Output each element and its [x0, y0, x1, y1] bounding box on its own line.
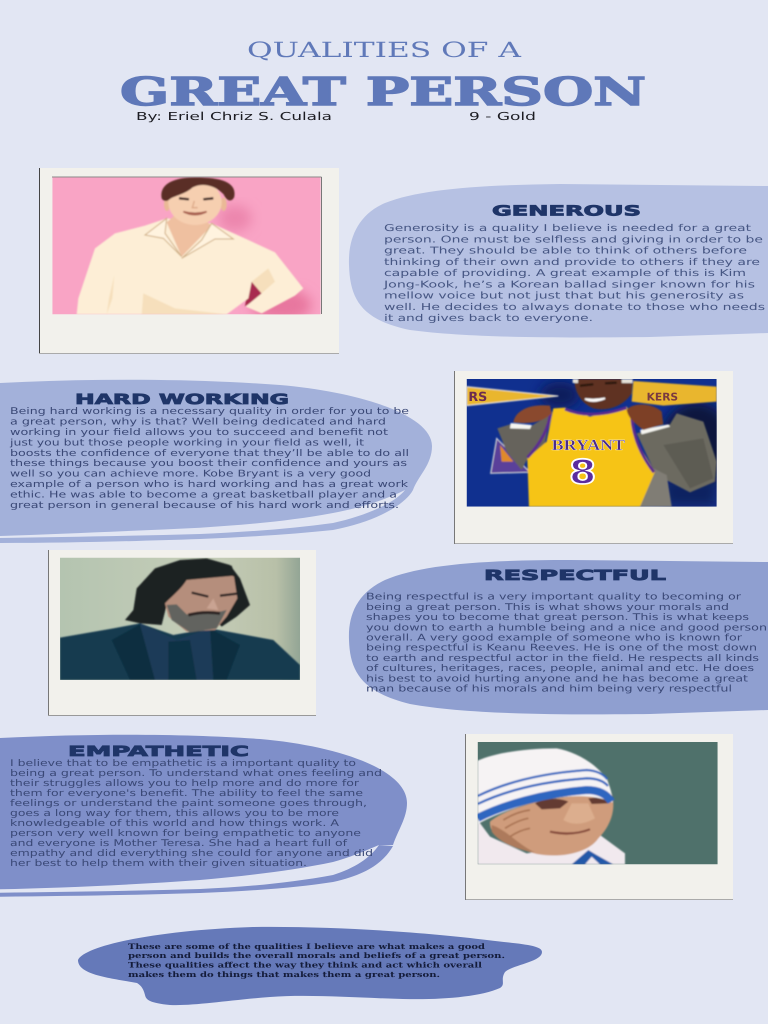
- body text: respectful: being respectful is Keanu Reeves. He is one of the most down: [366, 643, 757, 654]
- body text: hard working: these things because you boost their confidence and yours as: [10, 458, 407, 469]
- closing text: These are some of the qualities I believe are what makes a good: [128, 942, 486, 951]
- title: great person: GREAT PERSON: [120, 70, 646, 115]
- body text: generous: Generosity is a quality I believe is needed for a great: [384, 223, 751, 234]
- heading: hard working: HARD WORKING: [75, 392, 289, 408]
- body text: empathetic: them for everyone's benefit. The ability to feel the same: [10, 788, 363, 799]
- panel: empathetic: [0, 735, 407, 897]
- body text: respectful: man because of his morals and him being very respectful: [366, 684, 732, 694]
- body text: generous: [382, 223, 765, 324]
- photo card: Keanu Reeves: [48, 550, 316, 716]
- body text: respectful: to earth and respectful actor in the field. He respects all kinds: [366, 653, 759, 664]
- body text: respectful: Being respectful is a very important quality to becoming or: [366, 592, 741, 603]
- swoosh under panel: [0, 490, 413, 543]
- panel background shape: [0, 735, 407, 889]
- body text: generous: well. He decides to always donate to those who needs: [384, 302, 765, 313]
- photo card: Kobe Bryant: KERS: [647, 390, 678, 403]
- body text: respectful: [366, 592, 767, 694]
- body text: hard working: boosts the confidence of everyone that they’ll be able to do all: [10, 448, 409, 459]
- closing text: makes them do things that makes them a great person.: [128, 970, 440, 979]
- panel: closing statement: [78, 927, 542, 1005]
- body text: empathetic: feelings or understand the paint someone goes through,: [10, 798, 367, 809]
- closing text: These qualities affect the way they think and act which overall: [128, 961, 482, 970]
- closing text: [128, 942, 505, 979]
- panel: respectful: [349, 560, 768, 714]
- body text: empathetic: being a great person. To understand what ones feeling and: [10, 768, 382, 779]
- author byline: By: Eriel Chriz S. Culala: [136, 110, 332, 123]
- swoosh under panel: [0, 845, 393, 897]
- body text: respectful: his best to avoid hurting anyone and he has become a great: [366, 673, 749, 684]
- panel background shape: [349, 184, 768, 337]
- body text: empathetic: knowledgeable of this world and how things work. A: [10, 818, 340, 829]
- body text: hard working: a great person, why is that? Well being dedicated and hard: [10, 416, 386, 427]
- body text: empathetic: their struggles allows you to help more and do more for: [10, 778, 359, 789]
- panel: hard working: [0, 380, 432, 543]
- body text: generous: great. They should be able to think of others before: [384, 246, 747, 256]
- photo card: Kobe Bryant: 8: [569, 452, 596, 491]
- class label: 9 - Gold: [469, 110, 536, 123]
- photo card: Kobe Bryant: RS: [468, 389, 487, 404]
- body text: generous: mellow voice but not just that but his generosity as: [384, 290, 744, 302]
- body text: generous: it and gives back to everyone.: [384, 313, 593, 324]
- photo card: Kobe Bryant: [454, 371, 733, 544]
- body text: empathetic: and everyone is Mother Teresa. She had a heart full of: [10, 838, 348, 849]
- body text: generous: Jong-Kook, he’s a Korean ballad singer known for his: [382, 279, 755, 290]
- body text: respectful: of cultures, heritages, races, people, animal and etc. He does: [366, 663, 754, 674]
- heading: generous: GENEROUS: [492, 204, 641, 220]
- body text: generous: thinking of their own and provide to others if they are: [384, 257, 760, 268]
- body text: empathetic: goes a long way for them, this allows you to be more: [10, 808, 339, 819]
- panel background shape: [0, 380, 432, 536]
- body text: hard working: just you but those people working in your field as well, it: [9, 437, 365, 448]
- title: qualities of a: QUALITIES OF A: [247, 38, 522, 62]
- body text: empathetic: her best to help them with their given situation.: [10, 858, 307, 869]
- closing text: person and builds the overall morals and beliefs of a great person.: [128, 951, 505, 960]
- body text: hard working: [9, 406, 409, 511]
- body text: empathetic: person very well known for being empathetic to anyone: [10, 828, 361, 839]
- panel background shape: [349, 560, 768, 714]
- body text: hard working: example of a person who is hard working and has a great work: [10, 479, 409, 490]
- closing background shape: [78, 927, 542, 1005]
- body text: hard working: ethic. He was able to become a great basketball player and a: [10, 490, 397, 501]
- panel: generous: [349, 184, 768, 337]
- photo card: Kobe Bryant: BRYANT: [552, 436, 625, 453]
- body text: respectful: you down to earth a humble being and a nice and good person: [366, 622, 767, 633]
- heading: empathetic: EMPATHETIC: [68, 744, 249, 760]
- photo card: Mother Teresa: [465, 734, 733, 900]
- body text: respectful: shapes you to become that great person. This is what keeps: [366, 612, 749, 623]
- body text: empathetic: empathy and did everything she could for anyone and did: [10, 848, 373, 859]
- body text: generous: capable of providing. A great example of this is Kim: [384, 268, 746, 279]
- body text: hard working: well so you can achieve more. Kobe Bryant is a very good: [10, 469, 371, 480]
- title block: [120, 38, 646, 123]
- body text: hard working: great person in general because of his hard work and efforts.: [10, 500, 399, 511]
- heading: respectful: RESPECTFUL: [484, 568, 666, 584]
- body text: respectful: overall. A very good example of someone who is known for: [366, 632, 742, 644]
- body text: empathetic: I believe that to be empathetic is a important quality to: [10, 758, 356, 769]
- body text: generous: person. One must be selfless and giving in order to be: [384, 234, 763, 245]
- body text: hard working: working in your field allows you to succeed and benefit not: [10, 427, 389, 438]
- body text: hard working: Being hard working is a necessary quality in order for you to be: [10, 406, 409, 417]
- body text: empathetic: [10, 758, 382, 869]
- photo card: Kim Jong-Kook: [39, 168, 339, 354]
- body text: respectful: being a great person. This is what shows your morals and: [366, 602, 729, 613]
